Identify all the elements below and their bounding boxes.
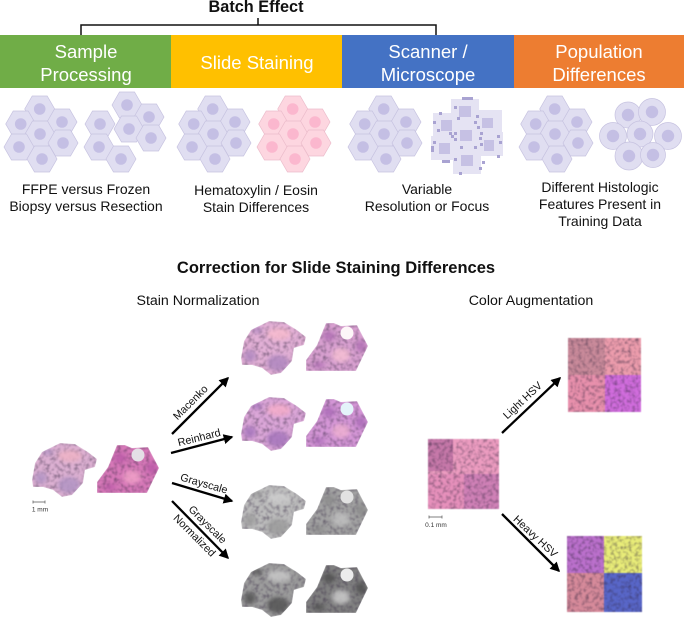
image: Reinhard result <box>241 397 368 451</box>
image: Heavy HSV tiles <box>567 536 642 612</box>
text: population caption: Features Present in <box>539 196 661 212</box>
arrow: Macenko: Macenko <box>171 383 211 423</box>
icon: pink stained cell cluster <box>257 96 331 172</box>
scale bar: 1 mm <box>32 500 48 514</box>
panel: population header: Differences <box>552 64 646 85</box>
arrow: Macenko <box>171 378 228 434</box>
image: Grayscale Normalized result <box>241 563 368 617</box>
arrow: Reinhard: Reinhard <box>177 427 222 449</box>
panel: scanner header: Scanner / <box>388 41 468 62</box>
arrow: Grayscale Normalized: Grayscale <box>186 503 229 546</box>
text: sample processing caption: FFPE versus Frozen <box>22 181 150 197</box>
text: scanner caption: Variable <box>402 181 452 197</box>
arrow: Light HSV <box>501 378 560 433</box>
icon: lavender stained cell cluster <box>177 96 251 172</box>
panel: scanner header: Microscope <box>381 64 475 85</box>
arrow: Reinhard <box>171 427 232 453</box>
arrow: Grayscale Normalized: Normalized <box>171 512 218 559</box>
subheading: color augmentation: Color Augmentation <box>469 293 593 309</box>
image: Light HSV tiles <box>568 338 641 412</box>
arrow: Grayscale: Grayscale <box>179 472 229 497</box>
text: population caption: Training Data <box>558 213 642 229</box>
text: slide staining caption <box>194 182 318 215</box>
text: slide staining caption: Stain Differences <box>203 199 309 215</box>
panel: slide staining header <box>171 35 342 88</box>
panel: scanner header <box>342 35 514 88</box>
text: slide staining caption: Hematoxylin / Eosin <box>194 182 318 198</box>
bracket connecting categories <box>81 18 436 35</box>
scale bar: 1 mm: 1 mm <box>32 506 48 514</box>
text: sample processing caption <box>9 181 163 214</box>
text: sample processing caption: Biopsy versus Resection <box>9 198 163 214</box>
panel: slide staining header: Slide Staining <box>200 52 314 73</box>
arrow: Grayscale Normalized <box>171 501 229 559</box>
text: population caption: Different Histologic <box>541 179 659 195</box>
image: source color tile <box>428 439 499 509</box>
scale bar: 0.1 mm: 0.1 mm <box>425 522 447 529</box>
subheading: stain normalization: Stain Normalization <box>136 293 260 309</box>
panel: population header: Population <box>555 41 643 62</box>
icon: intact cell cluster, sample processing <box>4 96 78 172</box>
panel: sample processing header: Processing <box>40 64 132 85</box>
icon: round cell cluster <box>600 98 682 170</box>
panel: sample processing header <box>0 35 171 88</box>
panel: population header <box>514 35 684 88</box>
icon: sharp cell cluster <box>348 96 422 172</box>
arrow: Heavy HSV: Heavy HSV <box>511 513 560 561</box>
scale bar: 0.1 mm <box>425 516 447 529</box>
icon: hexagonal cell cluster <box>519 96 593 172</box>
text: scanner caption: Resolution or Focus <box>365 198 489 214</box>
heading: correction section: Correction for Slide Staining Differences <box>177 259 495 277</box>
image: Grayscale result <box>241 485 368 539</box>
icon: pixelated cell cluster <box>431 97 503 175</box>
text: population caption <box>539 179 661 229</box>
image: Macenko result <box>241 321 368 375</box>
panel: sample processing header: Sample <box>55 41 117 62</box>
arrow: Heavy HSV <box>502 513 560 571</box>
text: scanner caption <box>365 181 489 214</box>
icon: fragmented cell cluster <box>84 92 166 172</box>
arrow: Light HSV: Light HSV <box>501 379 545 422</box>
image: source tissue slides <box>32 443 159 497</box>
